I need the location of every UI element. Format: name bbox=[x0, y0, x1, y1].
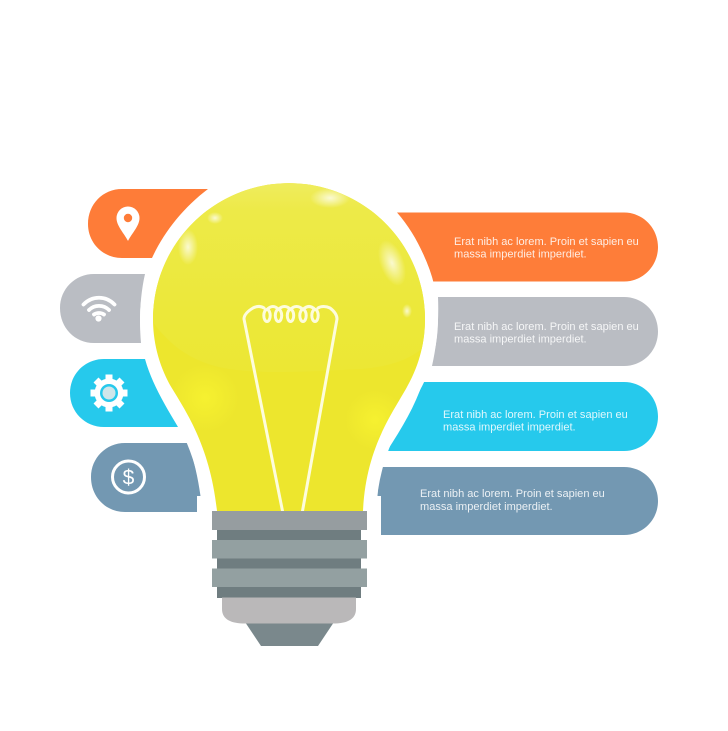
text block: Erat nibh ac lorem. Proin et sapien eu bbox=[454, 321, 639, 333]
bulb screw base bbox=[212, 511, 367, 646]
text block: Erat nibh ac lorem. Proin et sapien eu bbox=[420, 488, 605, 500]
panel: orange right bar bbox=[397, 212, 658, 282]
panel: slate left tab bbox=[91, 443, 200, 512]
icon: location pin bbox=[116, 206, 140, 241]
panel: grey left tab bbox=[60, 274, 145, 343]
icon: light bulb bbox=[140, 170, 440, 646]
text block: Erat nibh ac lorem. Proin et sapien eu bbox=[443, 409, 628, 421]
icon: dollar coin: $ bbox=[123, 466, 135, 490]
bulb glass bbox=[140, 170, 440, 511]
text block: massa imperdiet imperdiet. bbox=[420, 501, 553, 513]
text block: massa imperdiet imperdiet. bbox=[454, 334, 587, 346]
text block: Erat nibh ac lorem. Proin et sapien eu bbox=[454, 236, 639, 248]
panel: orange left tab bbox=[88, 189, 208, 258]
icon: wifi bbox=[84, 298, 114, 320]
text block: massa imperdiet imperdiet. bbox=[443, 422, 576, 434]
text block: massa imperdiet imperdiet. bbox=[454, 248, 587, 260]
filament bbox=[244, 306, 337, 511]
panel: cyan right bar bbox=[387, 382, 658, 451]
panel: cyan left tab bbox=[70, 359, 178, 427]
panel: slate right bar bbox=[378, 467, 658, 535]
icon: gear bbox=[90, 374, 128, 412]
panel: grey right bar bbox=[432, 297, 658, 366]
